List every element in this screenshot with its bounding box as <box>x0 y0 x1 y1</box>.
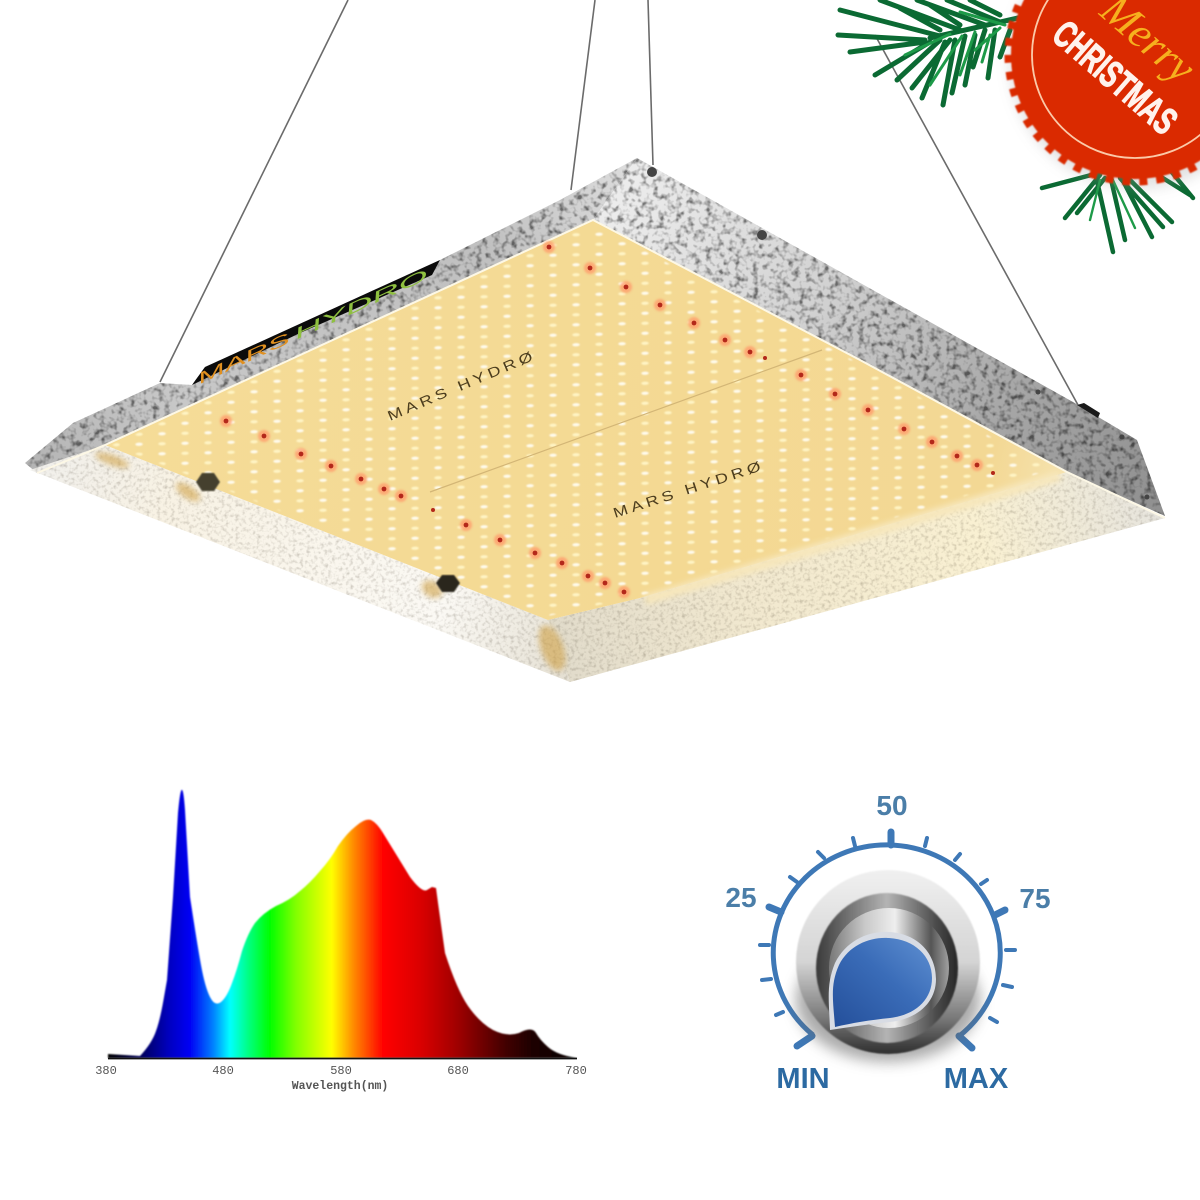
dimmer dial <box>725 790 1051 1095</box>
axis tick labels: 480 <box>212 1064 234 1078</box>
hex knob left <box>196 473 220 491</box>
board right edge white trim <box>37 220 1165 518</box>
board logo upper: MARS HYDRØ <box>385 347 538 424</box>
axis title: Wavelength(nm) <box>292 1080 388 1093</box>
board to flap blend <box>645 476 1060 600</box>
knob shadow <box>796 938 980 1062</box>
hanging wires <box>160 0 1078 405</box>
knob inner chrome <box>829 908 949 1028</box>
LED grow light panel <box>25 158 1165 682</box>
dial labels: 50 <box>876 790 908 821</box>
knob blue pointer <box>829 932 936 1030</box>
LED board <box>105 220 1067 620</box>
axis tick labels <box>95 1064 587 1078</box>
christmas decoration <box>838 0 1200 252</box>
seal shadow <box>1010 0 1200 188</box>
knob outer chrome <box>796 870 980 1054</box>
spectrum curve <box>108 790 577 1058</box>
dial labels <box>725 790 1051 1095</box>
pine branch top <box>838 0 1018 105</box>
white LED grid <box>112 224 1050 616</box>
knob middle chrome <box>816 893 958 1043</box>
dial scale arc <box>773 845 1000 1037</box>
red seal badge <box>1008 0 1200 182</box>
reflector: upper right flap <box>593 158 1165 516</box>
spectrum chart <box>95 790 587 1093</box>
axis tick labels: 580 <box>330 1064 352 1078</box>
axis tick labels: 680 <box>447 1064 469 1078</box>
dial labels: MAX <box>944 1063 1009 1095</box>
seal inner ring <box>1032 0 1200 158</box>
frame screws and clip <box>647 167 1150 500</box>
hex knob right <box>436 575 460 592</box>
dial labels: MIN <box>776 1063 830 1095</box>
brand label on frame: MARS <box>195 331 293 387</box>
dial labels: 25 <box>725 882 757 913</box>
board logo lower: MARS HYDRØ <box>611 457 766 521</box>
reflector: upper left flap <box>25 158 637 473</box>
brand label on frame <box>192 260 440 387</box>
board divider <box>430 350 822 492</box>
axis tick labels: 380 <box>95 1064 117 1078</box>
golden corner glows <box>93 449 571 674</box>
dial ticks <box>760 832 1015 1048</box>
axis tick labels: 780 <box>565 1064 587 1078</box>
brand label on frame: HYDRO <box>292 267 431 343</box>
dial labels: 75 <box>1019 883 1051 914</box>
pine branch bottom <box>1042 170 1193 252</box>
reflector: lower right flap <box>548 472 1165 682</box>
reflector: lower left flap <box>30 445 570 682</box>
x axis <box>108 1058 577 1060</box>
red LEDs <box>220 241 995 598</box>
